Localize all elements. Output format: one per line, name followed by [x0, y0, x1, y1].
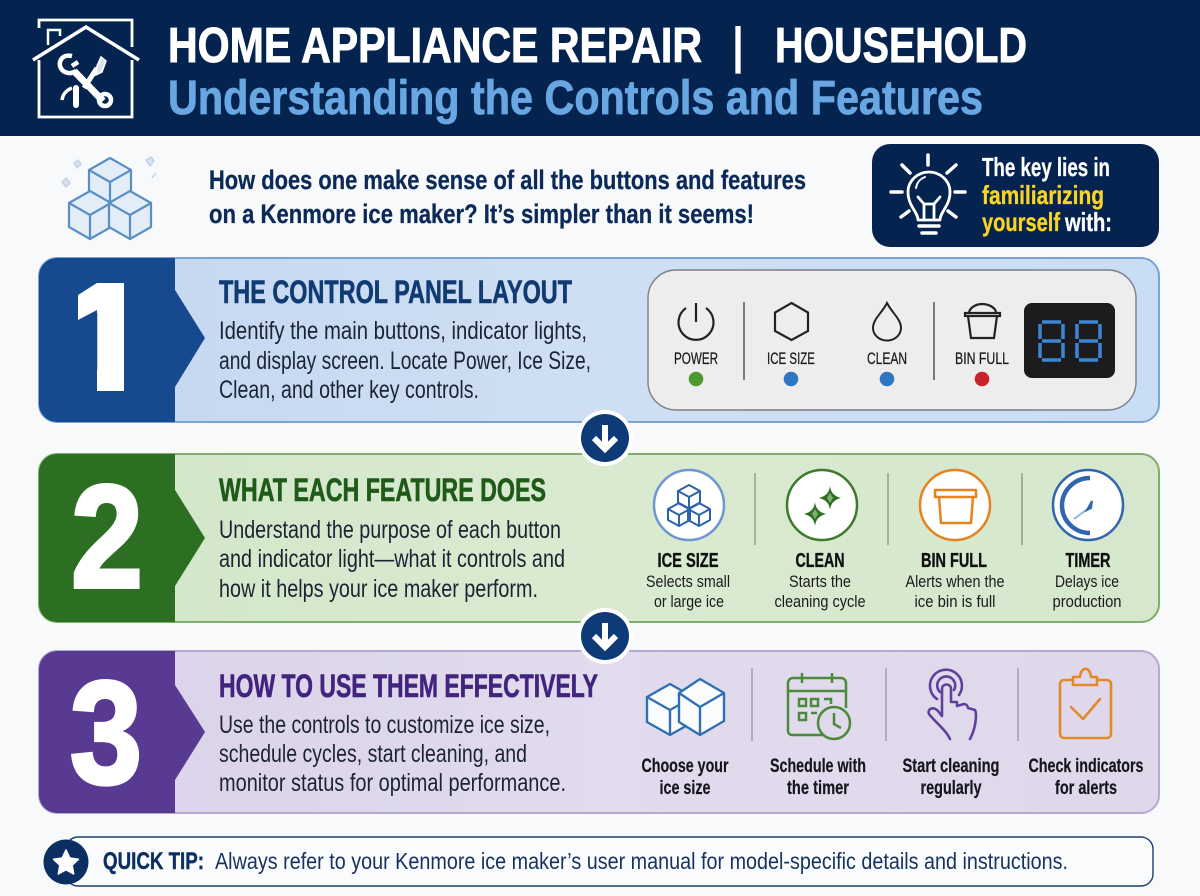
description	[219, 516, 565, 603]
heading: THE CONTROL PANEL LAYOUT	[219, 274, 572, 310]
quick tip bar: QUICK TIP:	[103, 848, 204, 875]
step: start cleaning: regularly	[920, 778, 982, 799]
intro question	[209, 165, 806, 229]
description: schedule cycles, start cleaning, and	[219, 740, 527, 768]
callout: key lies in: familiarizing	[982, 180, 1104, 210]
icon: hexagon	[775, 303, 808, 340]
control labels: CLEAN	[867, 349, 907, 368]
description: and indicator light—what it controls and	[219, 545, 565, 573]
feature: timer	[1052, 470, 1123, 611]
icon: orange bin circle	[920, 470, 990, 540]
step: schedule with timer: the timer	[787, 778, 849, 799]
icon: sparkle circle	[787, 470, 857, 540]
panel 2: what each feature does	[39, 454, 1159, 622]
step: choose ice size: ice size	[660, 778, 710, 799]
icon: light bulb	[891, 155, 965, 233]
panel 3: how to use them effectively	[39, 651, 1159, 814]
description: Clean, and other key controls.	[219, 376, 479, 404]
description: Use the controls to customize ice size,	[219, 711, 550, 739]
step: choose ice size: Choose your	[642, 756, 729, 777]
feature: bin full: BIN FULL	[921, 550, 987, 572]
icon: calendar and clock	[788, 673, 850, 739]
feature: clean: cleaning cycle	[774, 592, 866, 611]
step: check indicators	[1028, 669, 1144, 799]
digital display	[1024, 303, 1115, 378]
subtitle: Understanding the Controls and Features	[168, 72, 983, 125]
step: schedule with timer: Schedule with	[770, 756, 866, 777]
intro question: on a Kenmore ice maker? It’s simpler than it seems!	[209, 199, 754, 229]
icon: two cubes	[647, 679, 724, 735]
step: check indicators: for alerts	[1055, 778, 1117, 799]
description	[219, 317, 591, 404]
arrow: step 1 to 2	[577, 410, 633, 466]
description: monitor status for optimal performance.	[219, 769, 566, 797]
quick tip bar	[44, 837, 1153, 886]
icon: house with wrench and screwdriver	[33, 20, 139, 117]
heading: WHAT EACH FEATURE DOES	[219, 472, 546, 508]
number badge 2: 2	[71, 455, 143, 618]
step: choose ice size	[642, 679, 729, 799]
description	[219, 711, 566, 797]
header banner	[0, 0, 1200, 136]
step: start cleaning	[902, 670, 1000, 799]
control labels: BIN FULL	[955, 349, 1009, 368]
feature: timer: Delays ice	[1055, 572, 1119, 591]
feature: ice size: or large ice	[654, 592, 724, 611]
intro question: How does one make sense of all the buttons and features	[209, 165, 806, 195]
icon: star badge	[44, 840, 88, 884]
icon: clipboard check	[1060, 669, 1111, 738]
control labels	[674, 349, 1009, 368]
callout: key lies in: yourself	[982, 207, 1060, 237]
description: how it helps your ice maker perform.	[219, 575, 538, 603]
description: and display screen. Locate Power, Ice Size,	[219, 347, 591, 375]
icon: clock circle	[1053, 470, 1123, 540]
feature: ice size: Selects small	[646, 572, 730, 591]
title: |	[733, 19, 743, 73]
control labels: POWER	[674, 349, 718, 368]
description: Understand the purpose of each button	[219, 516, 561, 544]
icon: water drop	[873, 303, 901, 340]
callout: key lies in	[872, 144, 1159, 247]
control labels: ICE SIZE	[767, 349, 815, 368]
feature: clean	[774, 470, 866, 611]
number badge 3	[39, 651, 205, 814]
number badge 2	[39, 454, 205, 622]
callout: key lies in: with:	[1064, 207, 1112, 237]
indicator lights	[689, 372, 989, 386]
feature: ice size: ICE SIZE	[658, 550, 718, 572]
number badge 1: 1	[66, 252, 154, 424]
number badge 3: 3	[70, 651, 142, 814]
title: HOUSEHOLD	[775, 19, 1027, 73]
feature: bin full	[906, 470, 1004, 611]
control panel illustration	[648, 270, 1136, 410]
arrow: step 2 to 3	[577, 608, 633, 664]
feature: bin full: Alerts when the	[906, 572, 1004, 591]
step: check indicators: Check indicators	[1028, 756, 1144, 777]
feature: bin full: ice bin is full	[914, 592, 996, 611]
number badge 1	[39, 252, 205, 424]
feature: clean: CLEAN	[796, 550, 844, 572]
step: schedule with timer	[770, 673, 866, 799]
icon: ice size circle	[654, 470, 724, 540]
icon: power	[679, 303, 714, 340]
feature: timer: production	[1052, 592, 1122, 611]
icon: bin	[965, 304, 1000, 338]
title: HOME APPLIANCE REPAIR	[168, 19, 702, 73]
panel 1: control panel layout	[39, 252, 1159, 424]
feature: ice size	[646, 470, 730, 611]
quick tip bar: Always refer to your Kenmore ice maker’s user manual for model-specific details and instructions.	[215, 848, 1068, 874]
heading: HOW TO USE THEM EFFECTIVELY	[219, 668, 598, 704]
icon: ice cubes	[62, 157, 156, 239]
description: Identify the main buttons, indicator lights,	[219, 317, 587, 345]
callout: key lies in: The key lies in	[982, 152, 1110, 182]
step: start cleaning: Start cleaning	[902, 756, 1000, 777]
feature: clean: Starts the	[789, 572, 851, 591]
icon: touch hand	[929, 670, 976, 739]
feature: timer: TIMER	[1066, 550, 1111, 572]
